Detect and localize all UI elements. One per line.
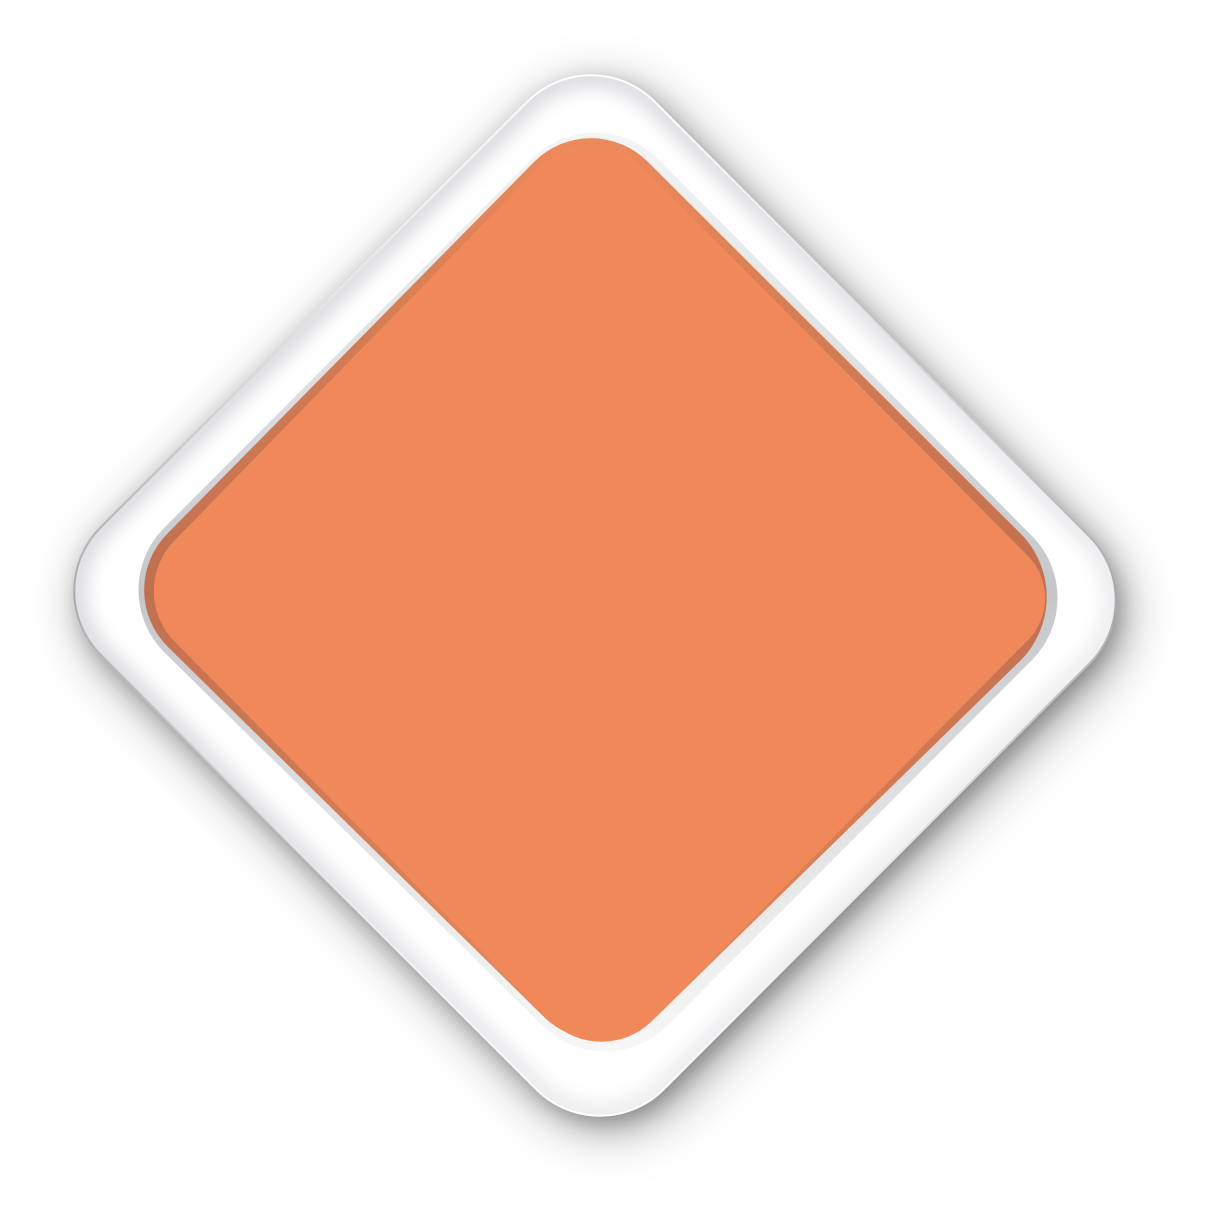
drop shadow (79, 82, 1125, 1129)
dark orange inner edge (144, 138, 1047, 1040)
orange diamond face (154, 145, 1045, 1042)
grey inset ring (138, 132, 1058, 1052)
white outer frame (74, 75, 1116, 1116)
